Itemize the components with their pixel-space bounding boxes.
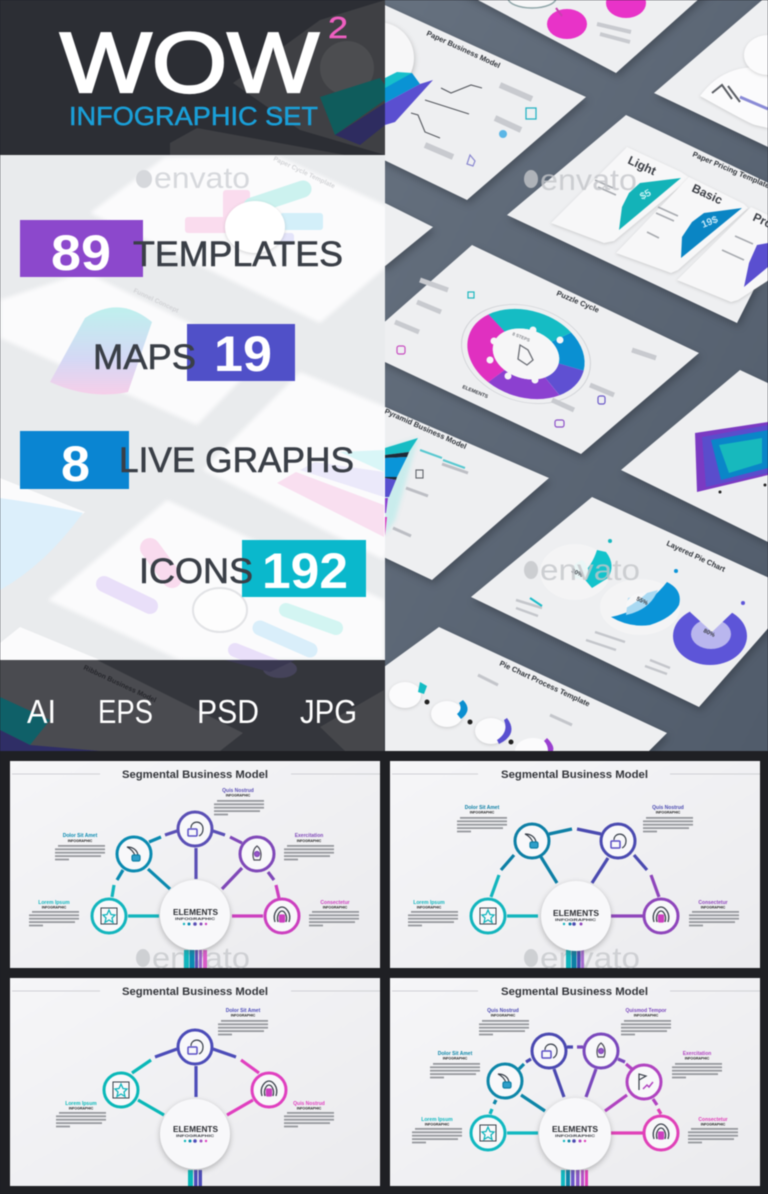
panel: left pale hero column — [0, 154, 386, 661]
panel: right isometric slide collage — [384, 0, 768, 752]
watermark: envato middle right: envato — [540, 554, 640, 587]
slide: pink node template — [469, 0, 706, 78]
faint slide: pale blue pie — [0, 478, 85, 590]
panel: three-segment model — [10, 978, 380, 1186]
watermark: envato left column: envato — [154, 162, 250, 195]
slide: paper pricing template: $5 — [638, 188, 654, 203]
stat: 89 templates: TEMPLATES — [133, 235, 343, 274]
panel: dark format band: Ribbon Business Model — [82, 664, 157, 704]
icons — [113, 1040, 277, 1098]
labels: INFOGRAPHIC — [491, 1014, 516, 1018]
labels: Dolor Sit Amet — [438, 1051, 473, 1057]
stat: maps 19: MAPS — [93, 338, 196, 377]
stat: 89 templates: 89 — [51, 225, 111, 281]
labels: INFOGRAPHIC — [231, 1014, 256, 1018]
labels: INFOGRAPHIC — [69, 1106, 94, 1110]
slide: puzzle cycle: 8 STEPS — [512, 331, 531, 343]
labels: INFOGRAPHIC — [425, 1122, 450, 1126]
stat: 8 live graphs: LIVE GRAPHS — [119, 441, 354, 480]
panel: five-segment model — [10, 761, 380, 975]
labels: INFOGRAPHIC — [701, 1122, 726, 1126]
labels: Lorem Ipsum — [413, 900, 445, 906]
labels: INFOGRAPHIC — [685, 1056, 710, 1060]
labels: Consectetur — [320, 900, 350, 906]
labels: Quis Nostrud — [293, 1101, 325, 1107]
chart: pie A: 30% — [570, 568, 584, 579]
pricing card: basic — [616, 177, 748, 273]
hub: ELEMENTS — [552, 1125, 599, 1134]
labels — [29, 788, 359, 926]
panel: dark header band — [0, 0, 385, 155]
labels: Dolor Sit Amet — [63, 833, 98, 839]
hub — [160, 1099, 230, 1169]
faint slide: paper cycle template: Paper Cycle Template — [272, 155, 336, 190]
panel: six-segment model — [390, 978, 760, 1186]
icons — [101, 822, 290, 924]
hub — [160, 880, 230, 950]
icons — [480, 834, 669, 924]
format: JPG: JPG — [300, 693, 357, 730]
chart: pie C — [672, 611, 748, 666]
hub: ELEMENTS — [173, 1125, 219, 1134]
hub: INFOGRAPHIC — [176, 1133, 214, 1138]
slide: layered pie chart: Layered Pie Chart — [665, 539, 727, 574]
chart: pie B — [611, 582, 681, 626]
slide: layered pie chart — [471, 497, 768, 707]
labels: INFOGRAPHIC — [417, 906, 442, 910]
heading: Segmental Business Model — [122, 986, 268, 998]
pricing card: pro — [677, 207, 768, 302]
labels: Exercitation — [295, 833, 323, 839]
slide: pyramid business model — [384, 406, 550, 584]
chart: puzzle ring — [460, 304, 592, 404]
hub — [539, 1098, 611, 1170]
labels: INFOGRAPHIC — [297, 1106, 322, 1110]
slide: paper pricing template — [507, 115, 768, 323]
connectors — [490, 1047, 661, 1133]
labels: INFOGRAPHIC — [68, 839, 93, 843]
slide: layered squares — [621, 370, 768, 542]
stripes — [566, 950, 584, 968]
heading: Segmental Business Model — [501, 769, 648, 781]
heading: Segmental Business Model — [122, 769, 268, 781]
panel: four-segment model — [390, 761, 760, 975]
faint slide: paper cycle template — [92, 156, 385, 322]
labels: Lorem Ipsum — [65, 1101, 97, 1107]
watermark: envato upper right — [524, 170, 636, 190]
stat: icons 192: ICONS — [139, 552, 253, 591]
hub: INFOGRAPHIC — [555, 917, 596, 922]
nodes — [92, 812, 299, 933]
labels: INFOGRAPHIC — [634, 1014, 659, 1018]
nodes — [471, 1034, 678, 1150]
slide: paper business model — [384, 4, 586, 204]
panel: dark format band — [0, 660, 385, 751]
slide: puzzle cycle — [355, 245, 699, 454]
labels: INFOGRAPHIC — [297, 839, 322, 843]
labels — [412, 1008, 738, 1143]
stat: 89 templates — [20, 220, 343, 281]
slide: pyramid business model: Pyramid Business Model — [383, 407, 468, 451]
slide: puzzle cycle: ELEMENTS — [461, 384, 489, 400]
watermark: envato — [540, 942, 640, 975]
labels: Consectetur — [698, 900, 728, 906]
stripes — [561, 1170, 588, 1186]
faint slide: speech bubble process — [48, 500, 384, 668]
stat: maps 19 — [93, 324, 295, 382]
slide: top-right rounded card — [654, 0, 768, 147]
labels: Quismod Tempor — [625, 1008, 667, 1014]
labels: INFOGRAPHIC — [470, 810, 495, 814]
subtitle: infographic set: INFOGRAPHIC SET — [69, 101, 318, 131]
chart: pie C: 80% — [702, 628, 716, 639]
superscript 2: 2 — [328, 10, 348, 45]
stat: icons 192: 192 — [262, 543, 348, 599]
labels: INFOGRAPHIC — [226, 794, 251, 798]
faint slide: funnel concept: Funnel Concept — [132, 287, 180, 315]
format: EPS: EPS — [98, 693, 153, 730]
labels: INFOGRAPHIC — [656, 810, 681, 814]
slide: paper pricing template: Light — [626, 153, 658, 178]
slide: paper business model: Paper Business Model — [425, 29, 502, 70]
stat: icons 192 — [139, 540, 366, 599]
heading: Segmental Business Model — [501, 986, 648, 998]
title: WOW: WOW — [60, 16, 319, 111]
connectors — [491, 829, 659, 916]
hub: INFOGRAPHIC — [555, 1133, 595, 1138]
labels: Dolor Sit Amet — [465, 805, 500, 811]
stat: 8 live graphs — [20, 431, 354, 492]
slide: pie chart process template — [384, 626, 668, 752]
faint slide: pyramid bands — [205, 373, 385, 558]
labels: Lorem Ipsum — [421, 1117, 453, 1123]
nodes — [471, 824, 678, 933]
stat: maps 19: 19 — [214, 326, 272, 382]
faint slide: bottom-left corner — [0, 627, 100, 660]
stripes — [188, 1170, 202, 1186]
stripes — [184, 950, 207, 968]
labels: Quis Nostrud — [652, 805, 684, 811]
hub — [541, 881, 611, 951]
watermark: envato upper right: envato — [540, 164, 637, 197]
labels — [56, 1008, 334, 1127]
labels: INFOGRAPHIC — [443, 1056, 468, 1060]
hub: INFOGRAPHIC — [175, 916, 215, 921]
labels — [408, 805, 739, 926]
labels: INFOGRAPHIC — [323, 906, 348, 910]
labels: INFOGRAPHIC — [42, 906, 67, 910]
slide: puzzle cycle: Puzzle Cycle — [555, 289, 601, 315]
connectors — [132, 1049, 259, 1115]
slide: paper pricing template: 19$ — [700, 214, 720, 231]
labels: Dolor Sit Amet — [226, 1008, 261, 1014]
hub: ELEMENTS — [173, 908, 219, 917]
icons — [480, 1043, 669, 1141]
chart: pie A — [571, 549, 612, 588]
slide: paper pricing template: Basic — [690, 181, 725, 207]
faint slide: funnel concept — [0, 277, 239, 424]
slide: left sliver — [384, 202, 434, 271]
nodes — [104, 1030, 286, 1107]
stat: 8 live graphs: 8 — [61, 436, 90, 492]
labels: Quis Nostrud — [222, 788, 254, 794]
chart: pie B: 55% — [635, 596, 649, 607]
hub: ELEMENTS — [553, 909, 600, 918]
watermark: envato — [152, 942, 250, 975]
labels: Lorem Ipsum — [38, 900, 70, 906]
watermark: envato middle right — [524, 560, 639, 581]
connectors — [112, 831, 279, 916]
labels: Consectetur — [698, 1117, 728, 1123]
labels: INFOGRAPHIC — [701, 906, 726, 910]
slide: pie chart process template: Pie Chart Process Template — [498, 659, 591, 709]
labels: Exercitation — [683, 1051, 711, 1057]
labels: Quis Nostrud — [487, 1008, 519, 1014]
format: AI: AI — [27, 693, 56, 730]
pricing card: light — [551, 147, 690, 243]
format: PSD: PSD — [197, 693, 259, 730]
